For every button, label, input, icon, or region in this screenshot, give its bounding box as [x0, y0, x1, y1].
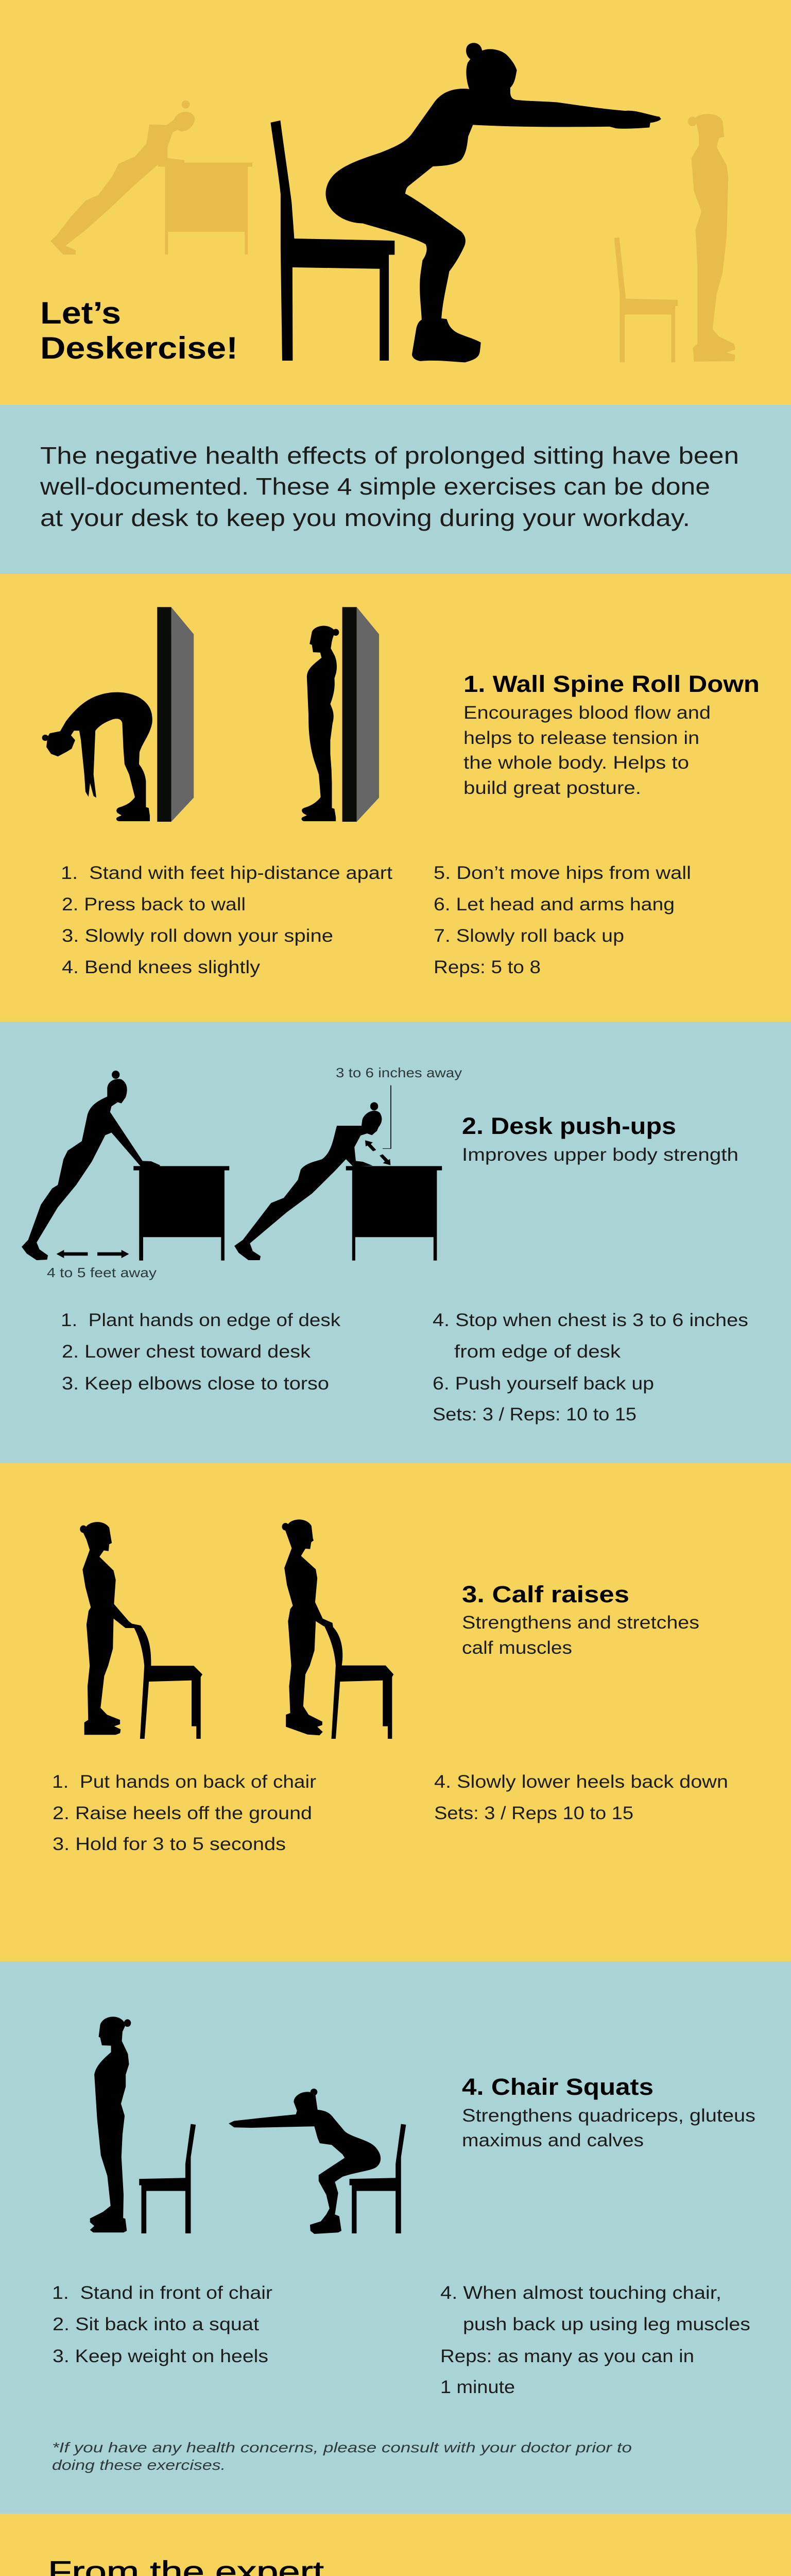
title: Let’s: [40, 296, 121, 330]
description: helps to release tension in: [463, 728, 699, 748]
illustration: heels raised with chair: [282, 1519, 393, 1739]
annotation: 3 to 6 inches: 3 to 6 inches away: [336, 1065, 462, 1080]
description: Strengthens and stretches: [462, 1613, 699, 1633]
main figure: squat with arms out: [271, 43, 661, 362]
illustration: flat feet with chair: [80, 1522, 202, 1739]
steps left: [52, 2283, 272, 2366]
description: calf muscles: [462, 1638, 572, 1658]
steps left: 1. Put hands on back of chair: [52, 1772, 316, 1792]
steps left: 2. Raise heels off the ground: [53, 1803, 312, 1823]
steps left: [61, 1310, 341, 1394]
title: [40, 296, 238, 365]
panel: chair squats: [0, 1961, 791, 2514]
steps left: 3. Hold for 3 to 5 seconds: [53, 1834, 286, 1854]
description: maximus and calves: [462, 2130, 644, 2150]
intro text: well-documented. These 4 simple exercises can be done: [40, 473, 710, 500]
label: 4 to 5 feet away: 4 to 5 feet away: [47, 1265, 157, 1280]
steps left: 1. Stand with feet hip-distance apart: [61, 863, 392, 883]
description: build great posture.: [463, 778, 641, 798]
title: Deskercise!: [40, 331, 238, 365]
panel: introduction: [0, 405, 791, 574]
panel: wall spine roll down: [0, 574, 791, 1022]
steps left: 4. Bend knees slightly: [62, 957, 261, 977]
steps left: 2. Press back to wall: [62, 894, 246, 914]
steps left: [61, 863, 392, 977]
steps left: 2. Sit back into a squat: [53, 2314, 259, 2334]
steps right: 6. Push yourself back up: [433, 1374, 654, 1394]
heading: 1. Wall Spine Roll Down: [463, 671, 760, 697]
intro text: at your desk to keep you moving during your workday.: [40, 504, 690, 531]
description: the whole body. Helps to: [463, 753, 689, 773]
description: Encourages blood flow and: [463, 703, 711, 723]
illustration: standing at wall: [302, 607, 379, 822]
steps right: [440, 2283, 750, 2397]
faded figure: desk push-up: [50, 100, 252, 255]
description: [462, 1613, 699, 1658]
faded figure: standing by chair: [614, 114, 735, 362]
steps right: [433, 1310, 748, 1425]
arrows: 4 to 5 feet: [57, 1250, 129, 1258]
steps right: 4. When almost touching chair,: [440, 2283, 721, 2303]
steps left: 1. Plant hands on edge of desk: [61, 1310, 341, 1330]
panel: hero: [0, 0, 791, 405]
steps right: from edge of desk: [454, 1342, 621, 1362]
steps right: [434, 863, 691, 977]
description: Improves upper body strength: [462, 1145, 738, 1165]
steps right: 4. Slowly lower heels back down: [434, 1772, 728, 1792]
disclaimer note: doing these exercises.: [52, 2457, 226, 2473]
disclaimer note: *If you have any health concerns, please consult with your doctor prior to: [52, 2439, 632, 2455]
description: Strengthens quadriceps, gluteus: [462, 2106, 755, 2126]
intro text: The negative health effects of prolonged sitting have been: [40, 442, 739, 469]
steps left: 1. Stand in front of chair: [52, 2283, 272, 2303]
annotation: 3 to 6 inches: [336, 1065, 462, 1165]
steps right: Reps: 5 to 8: [434, 957, 541, 977]
steps left: [52, 1772, 316, 1854]
panel: from the expert: [0, 2514, 791, 2576]
steps right: 4. Stop when chest is 3 to 6 inches: [433, 1310, 748, 1330]
steps right: 6. Let head and arms hang: [434, 894, 675, 914]
steps right: [434, 1772, 728, 1823]
description: [463, 703, 711, 798]
steps right: 5. Don’t move hips from wall: [434, 863, 691, 883]
intro text: [40, 442, 739, 531]
steps right: Sets: 3 / Reps 10 to 15: [434, 1803, 633, 1823]
heading: 2. Desk push-ups: [462, 1113, 676, 1139]
steps right: push back up using leg muscles: [463, 2314, 750, 2334]
heading: 3. Calf raises: [462, 1581, 629, 1607]
steps right: Reps: as many as you can in: [440, 2346, 694, 2366]
steps right: Sets: 3 / Reps: 10 to 15: [433, 1404, 637, 1425]
illustration: bent over at wall: [42, 607, 194, 822]
steps right: 7. Slowly roll back up: [434, 926, 624, 946]
steps left: 3. Keep weight on heels: [53, 2346, 268, 2366]
disclaimer note: [52, 2439, 632, 2473]
panel: desk push-ups: [0, 1022, 791, 1463]
steps right: 1 minute: [440, 2377, 515, 2397]
illustration: squatting before chair: [229, 2089, 406, 2234]
illustration: leaning on desk: [22, 1071, 229, 1261]
heading: 4. Chair Squats: [462, 2074, 654, 2100]
steps left: 2. Lower chest toward desk: [62, 1342, 311, 1362]
illustration: lowered to desk: [234, 1102, 442, 1261]
description: [462, 2106, 755, 2150]
illustration: standing before chair: [90, 2016, 196, 2233]
steps left: 3. Slowly roll down your spine: [62, 926, 333, 946]
steps left: 3. Keep elbows close to torso: [62, 1374, 329, 1394]
panel: calf raises: [0, 1463, 791, 1961]
